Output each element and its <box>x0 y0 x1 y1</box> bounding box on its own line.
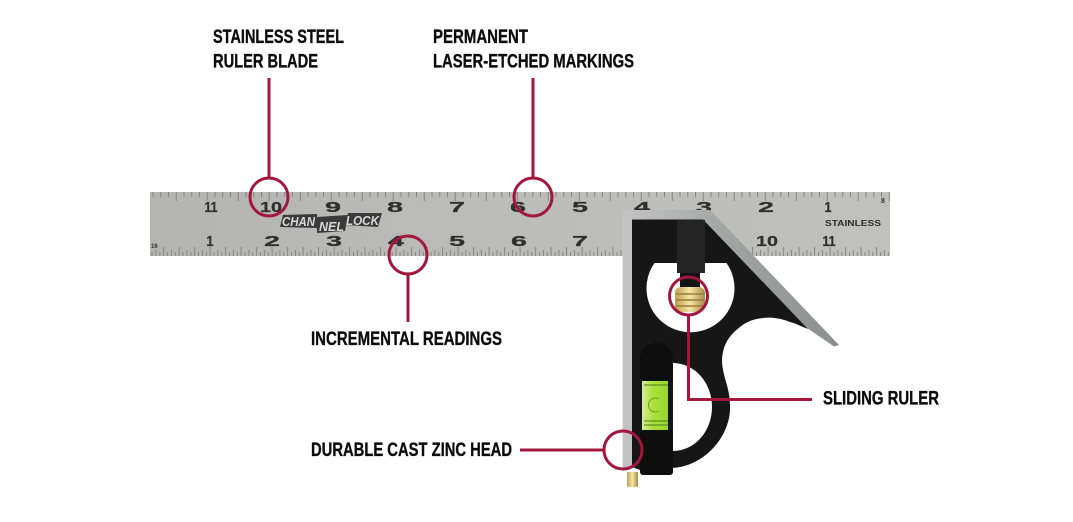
ruler bottom scale numbers: 10 <box>756 233 778 250</box>
brand logo: NEL <box>319 219 344 234</box>
brass knob <box>675 273 705 312</box>
ruler top scale numbers: 2 <box>758 199 774 216</box>
callout: durable cast zinc head <box>311 431 642 469</box>
ruler top scale numbers: 9 <box>325 199 341 216</box>
ruler top scale numbers: 11 <box>204 199 218 216</box>
brand logo <box>280 213 382 234</box>
brand logo: LOCK <box>346 213 380 228</box>
callout: stainless steel ruler blade <box>213 27 344 216</box>
ruler top scale numbers: 1 <box>824 199 832 216</box>
ruler top scale numbers: 5 <box>572 199 588 216</box>
ruler top scale numbers: 6 <box>510 199 526 216</box>
ruler top scale numbers: 7 <box>449 199 465 216</box>
callout: permanent laser-etched markings: PERMANENT <box>433 27 528 48</box>
ruler bottom scale numbers <box>206 233 836 250</box>
ruler blade <box>150 192 890 256</box>
locking stem <box>677 220 705 273</box>
combination square head <box>622 210 839 487</box>
small scale marks: 16 <box>151 244 158 250</box>
ruler bottom scale numbers: 3 <box>326 233 342 250</box>
callout: sliding ruler <box>670 277 939 410</box>
callout: stainless steel ruler blade: RULER BLADE <box>213 52 318 72</box>
small scale marks <box>151 198 885 250</box>
spirit level <box>640 343 673 475</box>
callout: incremental readings: INCREMENTAL READINGS <box>311 329 502 350</box>
ruler top scale numbers: 3 <box>696 199 712 216</box>
ruler bottom scale numbers: 2 <box>264 233 280 250</box>
brand logo: CHAN <box>282 214 316 229</box>
ruler bottom scale numbers: 4 <box>388 233 405 250</box>
ruler top scale numbers: 8 <box>387 199 403 216</box>
ruler bottom scale numbers: 5 <box>449 233 465 250</box>
callout: stainless steel ruler blade: STAINLESS STEEL <box>213 27 344 48</box>
callout: sliding ruler: SLIDING RULER <box>823 388 939 410</box>
callout: durable cast zinc head: DURABLE CAST ZINC HEAD <box>311 440 512 461</box>
ruler bottom scale numbers: 1 <box>206 233 214 250</box>
ruler top scale numbers: 10 <box>260 199 282 216</box>
silver head edge <box>622 210 839 468</box>
ruler top scale numbers: 4 <box>634 199 651 216</box>
ruler bottom scale numbers: 11 <box>822 233 836 250</box>
brass pin <box>627 472 638 487</box>
black cast body <box>632 220 808 470</box>
small scale marks: 8 <box>881 198 885 205</box>
ruler bottom scale numbers: 7 <box>572 233 588 250</box>
callout: permanent laser-etched markings: LASER-ETCHED MARKINGS <box>433 52 634 72</box>
callout: incremental readings <box>311 236 502 350</box>
ruler top scale numbers <box>204 199 832 216</box>
stainless stamp: STAINLESS <box>825 219 882 228</box>
callout: permanent laser-etched markings <box>433 27 634 216</box>
ruler bottom scale numbers: 6 <box>511 233 527 250</box>
